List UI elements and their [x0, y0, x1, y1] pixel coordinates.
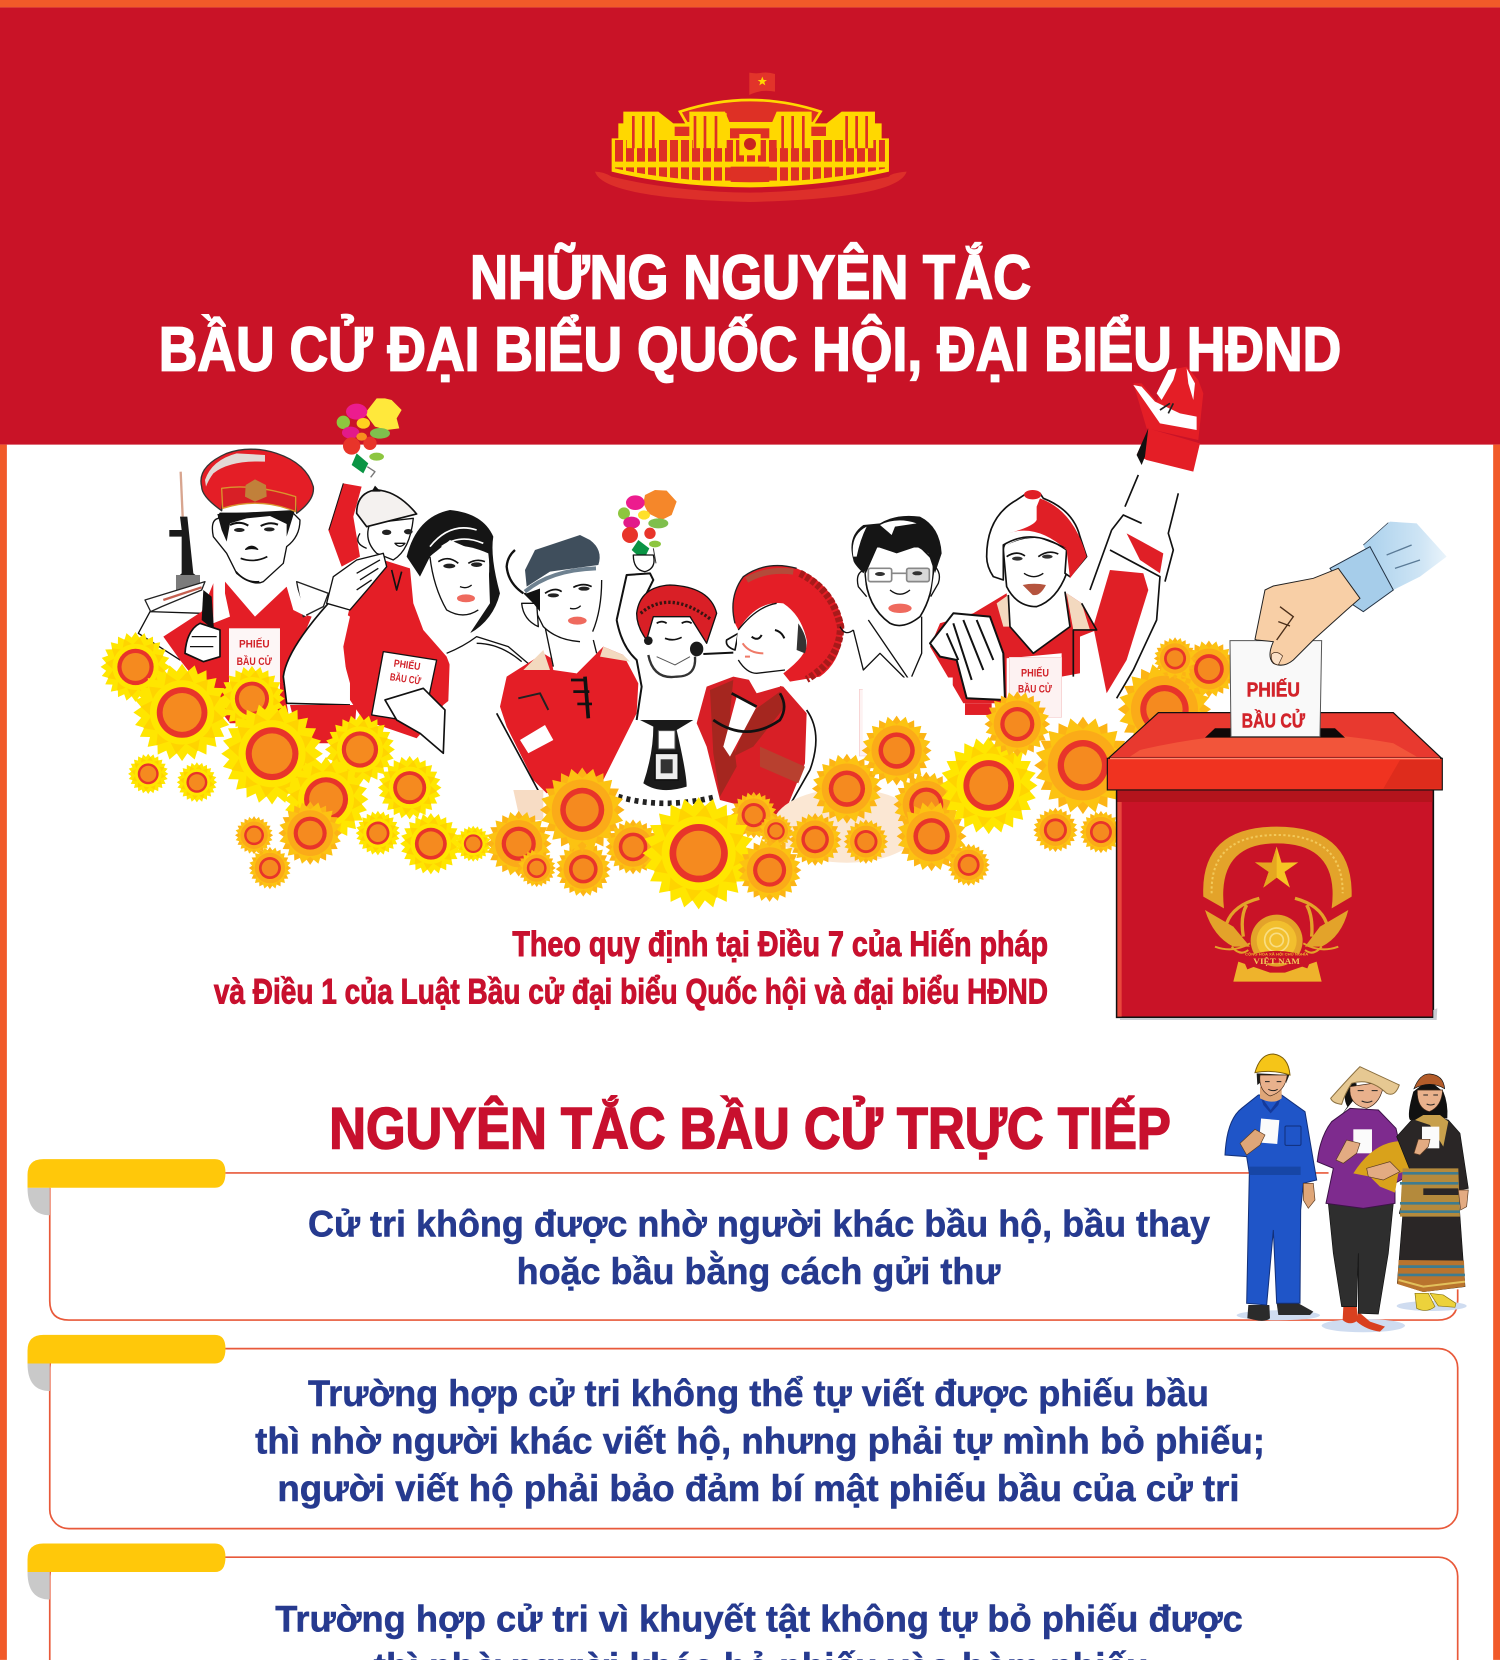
side borders [0, 445, 1500, 1660]
bouquet: left [337, 398, 402, 477]
card 1 text [308, 1202, 1210, 1292]
person: soldier [138, 449, 328, 723]
card 1 text: Cử tri không được nhờ người khác bầu hộ, bầu thay [308, 1202, 1210, 1244]
woman in purple [1317, 1067, 1419, 1332]
people: ethnic man, child, woman [477, 490, 843, 820]
ballot: mother: BẦU CỬ [389, 670, 422, 687]
ground ellipse [595, 172, 907, 202]
ballot in slot: PHIẾU [1247, 679, 1300, 702]
card 2 text [255, 1372, 1265, 1509]
card 2 text: người viết hộ phải bảo đảm bí mật phiếu bầu của cử tri [277, 1467, 1240, 1509]
ballot in slot: BẦU CỬ [1242, 709, 1305, 733]
card 3 text: Trường hợp cử tri vì khuyết tật không tự bỏ phiếu được [275, 1597, 1243, 1639]
illustration: crowd of voters [93, 367, 1244, 922]
ribbon tab [28, 1335, 225, 1391]
ribbon tab [28, 1543, 225, 1600]
worker in blue [1225, 1054, 1317, 1321]
flag [749, 72, 775, 95]
person: mother [283, 510, 530, 750]
ballot: worker: BẦU CỬ [1018, 683, 1052, 696]
building [612, 112, 889, 187]
people: soldier, child and mother [138, 398, 530, 753]
title [159, 242, 1341, 385]
subtitle: và Điều 1 của Luật Bầu cử đại biểu Quốc hội và đại biểu HĐND [214, 973, 1048, 1012]
shadows [1237, 1301, 1467, 1332]
ballot: soldier: PHIẾU [239, 638, 270, 651]
card 2 text: thì nhờ người khác viết hộ, nhưng phải tự mình bỏ phiếu; [255, 1419, 1265, 1461]
person: woman in round hat [697, 566, 843, 817]
ribbon tab [28, 1159, 225, 1215]
ballot in slot [1230, 641, 1322, 737]
sunflowers [93, 624, 1244, 922]
hand [1255, 568, 1360, 665]
box lid, slot, ballot and hand [1107, 522, 1447, 790]
subtitle: Theo quy định tại Điều 7 của Hiến pháp [512, 925, 1048, 964]
ethnic woman [1397, 1074, 1468, 1310]
people: man with glasses and worker [840, 367, 1203, 756]
card 2 text: Trường hợp cử tri không thể tự viết được phiếu bầu [308, 1372, 1209, 1414]
panel: card 2 [28, 1335, 1458, 1529]
hand holding ballot [385, 688, 445, 753]
box lid front [1107, 758, 1442, 790]
ballot: soldier: BẦU CỬ [237, 655, 272, 668]
heading: direct voting principle: NGUYÊN TẮC BẦU CỬ TRỰC TIẾP [329, 1097, 1171, 1162]
state emblem: VIỆT NAM [1253, 956, 1300, 966]
person: man with glasses [840, 516, 970, 753]
card 3 text [275, 1597, 1243, 1660]
ballot: mother [372, 652, 437, 723]
box body [1117, 790, 1437, 1020]
ballot: soldier [229, 628, 280, 695]
box slot [1205, 728, 1345, 738]
ballot: worker: PHIẾU [1021, 667, 1049, 680]
title: NHỮNG NGUYÊN TẮC [470, 242, 1031, 313]
person: child in red hat [610, 555, 742, 803]
ballot: mother: PHIẾU [393, 657, 421, 673]
card 1 text: hoặc bầu bằng cách gửi thư [517, 1250, 1001, 1292]
glove [1133, 367, 1203, 472]
ballot: worker [1009, 657, 1062, 717]
box lid top [1108, 713, 1442, 758]
state emblem [1203, 827, 1352, 982]
panel: red header band [0, 0, 1500, 445]
people: voters holding ballots [1225, 1054, 1468, 1332]
ballot box [1107, 522, 1447, 1020]
ballot: man with glasses: PHIẾU [873, 697, 901, 710]
subtitle [214, 925, 1048, 1012]
person: child on shoulders [328, 483, 460, 738]
person: worker with raised glove [930, 470, 1188, 715]
panel: card 1 [28, 1159, 1458, 1320]
dome [680, 100, 821, 123]
logo: National Assembly building [595, 72, 907, 202]
shirt sleeve [1330, 522, 1447, 612]
bouquet: centre [618, 490, 677, 563]
person: ethnic man [477, 525, 638, 820]
ballot: man with glasses: BẦU CỬ [870, 713, 903, 726]
ballot: man with glasses [859, 689, 913, 756]
panel: card 3 [28, 1543, 1458, 1660]
title: BẦU CỬ ĐẠI BIỂU QUỐC HỘI, ĐẠI BIỂU HĐND [159, 314, 1341, 385]
state emblem: CỘNG HÒA XÃ HỘI CHỦ NGHĨA [1245, 952, 1308, 957]
